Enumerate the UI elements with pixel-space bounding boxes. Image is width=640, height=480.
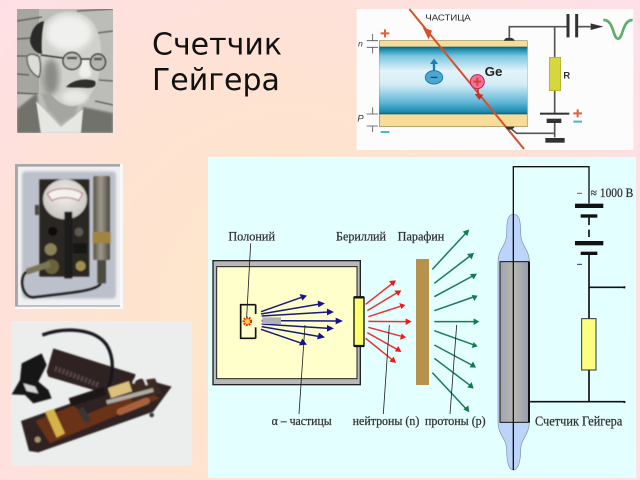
label: R: R bbox=[563, 71, 570, 81]
diagram: semiconductor detector bbox=[357, 9, 633, 150]
label: beryllium: Бериллий bbox=[336, 230, 386, 244]
moustache bbox=[66, 79, 96, 88]
battery plates bbox=[575, 204, 603, 255]
cable bbox=[22, 267, 101, 297]
photo: portrait of Geiger bbox=[17, 9, 113, 133]
resistor bbox=[582, 319, 596, 370]
label: Ge: Ge bbox=[485, 64, 502, 79]
Geiger counter circuit bbox=[498, 167, 633, 470]
contacts bbox=[504, 38, 515, 130]
electron bbox=[425, 59, 443, 84]
battery bbox=[540, 113, 569, 143]
paraffin block bbox=[416, 259, 429, 385]
label: paraffin: Парафин bbox=[398, 230, 445, 244]
label: voltage: ≈ 1000 В bbox=[591, 186, 633, 200]
tube bbox=[107, 390, 153, 402]
leader lines bbox=[247, 243, 457, 414]
title: Счетчик bbox=[152, 28, 282, 62]
wires bbox=[513, 167, 624, 470]
brass strap bbox=[45, 409, 65, 438]
label: Geiger counter: Счетчик Гейгера bbox=[535, 414, 622, 429]
forehead highlight bbox=[46, 15, 92, 51]
germanium crystal bbox=[379, 41, 527, 127]
particle track bbox=[409, 9, 524, 149]
label: neutrons: нейтроны (n) bbox=[353, 414, 419, 428]
terminals bbox=[623, 286, 625, 288]
panel: neutron experiment and Geiger counter bbox=[208, 157, 636, 478]
headband bbox=[42, 330, 112, 390]
alpha particle beams bbox=[261, 294, 343, 345]
proton arrows bbox=[432, 229, 479, 412]
photo: radiometer device bbox=[15, 164, 123, 309]
counter tube bbox=[498, 214, 529, 470]
capacitor bbox=[568, 14, 577, 37]
earpiece bbox=[12, 353, 52, 403]
experiment scheme bbox=[213, 229, 486, 428]
beryllium window bbox=[354, 297, 364, 346]
circuit wires bbox=[367, 27, 591, 137]
lid bbox=[47, 348, 136, 395]
device body bbox=[39, 179, 89, 277]
label: particle: ЧАСТИЦА bbox=[425, 14, 471, 23]
signs bbox=[381, 29, 582, 132]
cheek shadow bbox=[43, 59, 59, 95]
label: protons: протоны (p) bbox=[425, 414, 486, 428]
label: polonium: Полоний bbox=[228, 230, 275, 244]
probe tube bbox=[93, 176, 110, 260]
neck and shirt bbox=[36, 101, 83, 133]
polonium source bbox=[241, 305, 256, 338]
jacket bbox=[17, 93, 113, 133]
case bbox=[21, 378, 172, 452]
label: n: n bbox=[358, 39, 363, 49]
output pulse bbox=[603, 20, 633, 39]
dial bbox=[43, 179, 87, 219]
cream cylinder bbox=[108, 381, 132, 398]
resistor bbox=[549, 57, 561, 91]
glasses bbox=[41, 52, 106, 70]
circuit board bbox=[36, 390, 160, 443]
title: Гейгера bbox=[152, 63, 280, 98]
nose and chin bbox=[79, 59, 91, 78]
strap bbox=[64, 212, 72, 278]
knobs bbox=[48, 227, 57, 236]
hair bbox=[30, 21, 44, 54]
neutron arrows bbox=[366, 280, 412, 363]
output arrow bbox=[591, 23, 603, 30]
hole bbox=[470, 75, 484, 100]
ear bbox=[27, 54, 40, 77]
labels bbox=[228, 230, 486, 428]
polarity signs bbox=[577, 192, 582, 195]
head bbox=[41, 12, 101, 106]
label: p: P bbox=[357, 113, 364, 123]
label: alpha particles: α – частицы bbox=[272, 414, 332, 428]
photo: opened counter bbox=[11, 321, 192, 466]
chamber bbox=[213, 261, 360, 385]
